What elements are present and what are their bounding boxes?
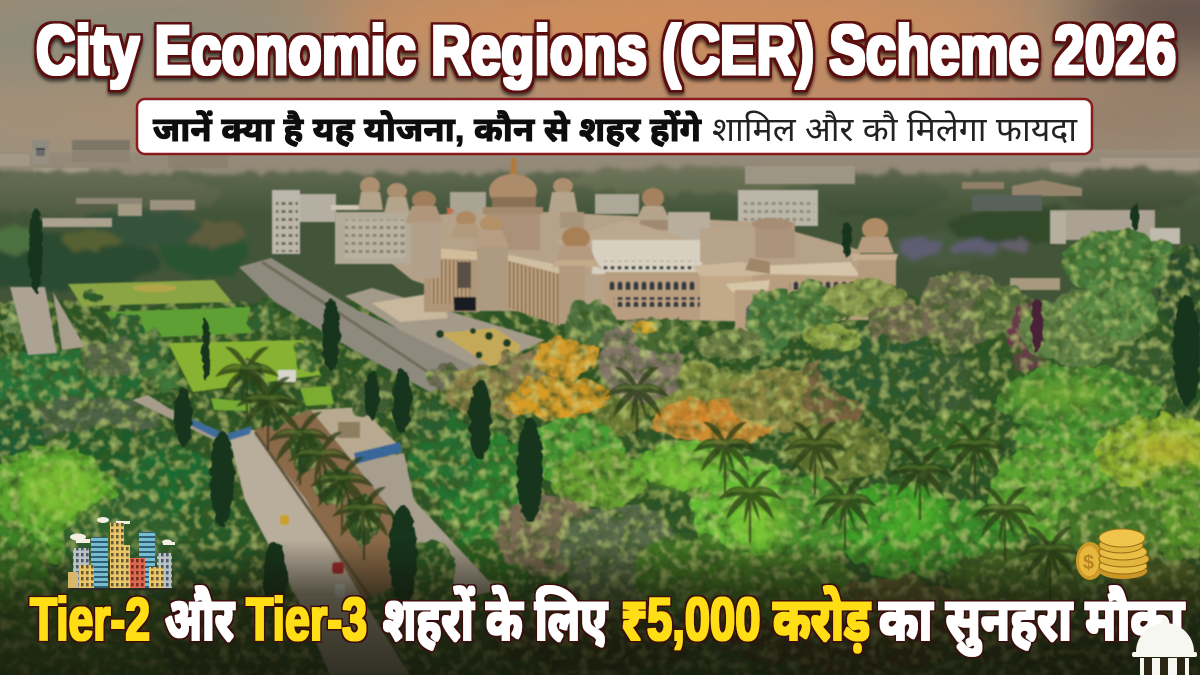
dark gradient behind lower headline xyxy=(0,540,1200,675)
palm trees xyxy=(215,347,1082,600)
headline: Tier-3: Tier-3 xyxy=(246,586,367,653)
Vidhana Soudha palace xyxy=(331,158,898,332)
icon: government dome xyxy=(1132,618,1197,675)
front small towers xyxy=(451,211,600,324)
lawn gardens xyxy=(68,280,232,306)
left front wing in perspective xyxy=(508,258,560,326)
tall conifer trees xyxy=(29,202,1200,614)
headline: aur: और xyxy=(165,586,235,653)
ornamental gate block xyxy=(745,258,770,274)
central domed tower xyxy=(483,158,543,250)
foreground tree canopy, back layer xyxy=(0,231,1200,675)
foreground tree canopy, front layer xyxy=(82,278,934,600)
subtitle panel xyxy=(137,99,1092,154)
icon: city buildings xyxy=(68,517,175,589)
base forest floor xyxy=(0,170,1200,675)
palace background mass xyxy=(340,210,860,322)
distant hazy city skyline xyxy=(0,140,1200,182)
sky with orange sunset clouds xyxy=(0,0,1200,180)
subtitle bold text: जानें क्या है यह योजना, कौन से शहर होंगे xyxy=(153,110,702,149)
icon: gold coins stack xyxy=(1076,529,1149,580)
vehicles xyxy=(332,562,344,574)
headline: shehron ke liye: शहरों के लिए xyxy=(383,586,608,653)
icon: gold coins stack: $ xyxy=(1083,552,1094,574)
back towers and left block xyxy=(331,177,710,264)
left tower xyxy=(405,191,443,278)
bright flowering tree highlights xyxy=(20,383,1200,544)
bottom headline xyxy=(30,586,1185,657)
right front wing with arched windows xyxy=(605,272,885,320)
main roof and central hall xyxy=(555,220,702,252)
distant buildings xyxy=(42,166,1180,290)
entrance porch xyxy=(424,250,480,312)
lower road and plaza xyxy=(132,395,228,440)
far right corner tower xyxy=(851,218,898,286)
roads, lawns and plazas xyxy=(10,258,545,675)
subtitle box xyxy=(137,99,1092,154)
distant tree canopy xyxy=(0,166,1200,322)
headline: Tier-2: Tier-2 xyxy=(30,586,150,653)
left side road xyxy=(10,287,57,355)
headline: amount: ₹5,000 करोड़ xyxy=(621,586,871,653)
upper boulevard xyxy=(239,258,482,392)
subtitle regular text: शामिल और कौ मिलेगा फायदा xyxy=(712,110,1078,149)
